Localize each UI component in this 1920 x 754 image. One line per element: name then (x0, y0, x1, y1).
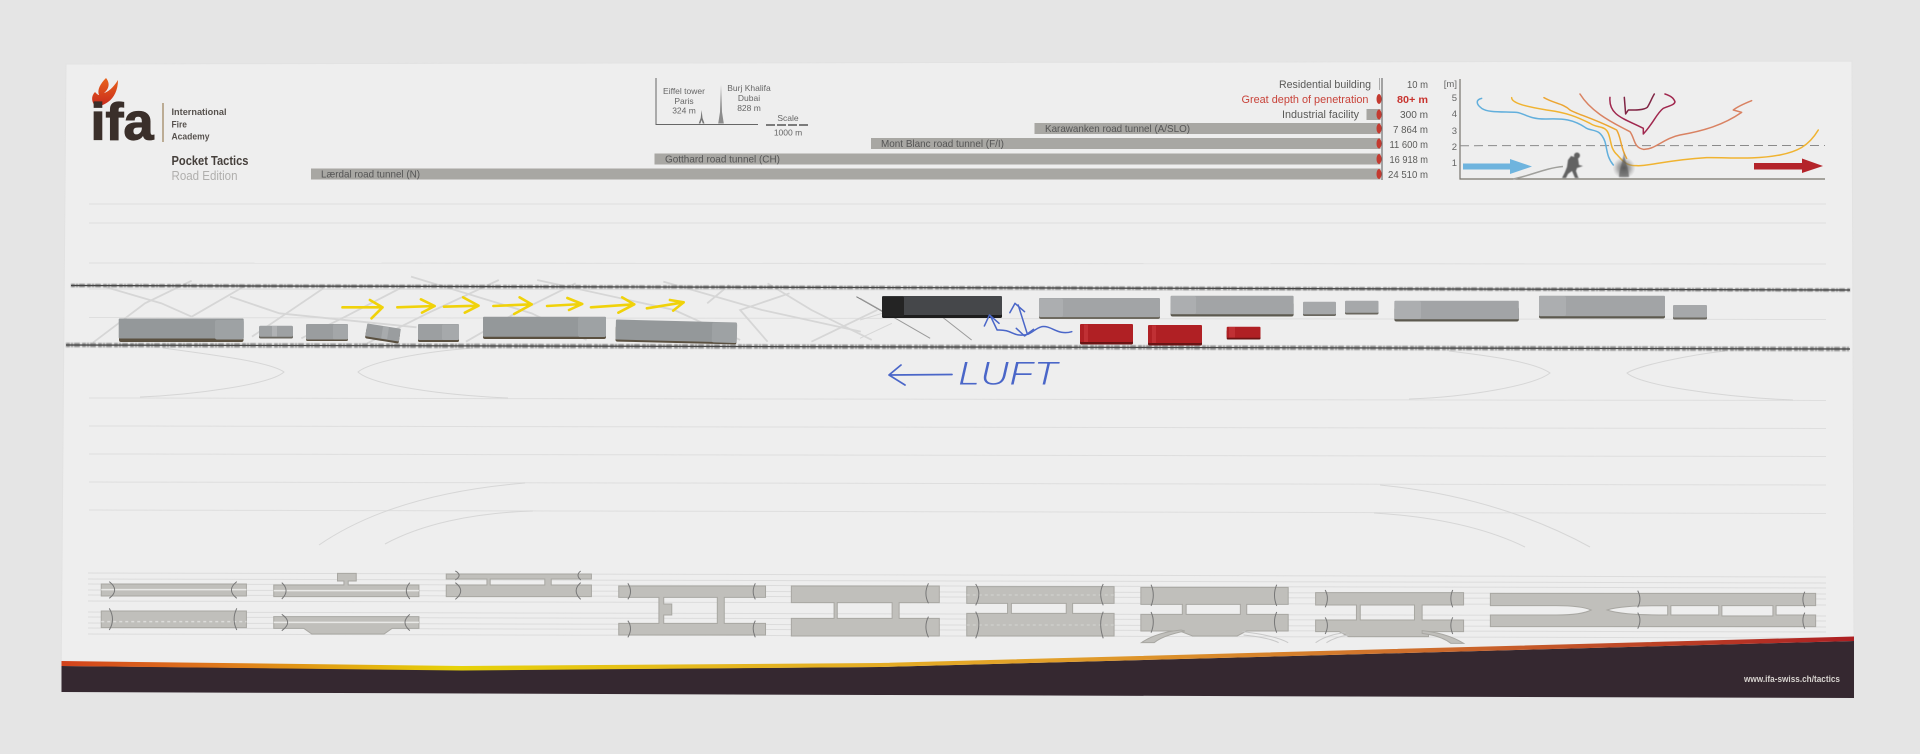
yellow arrows: traffic direction (342, 297, 684, 318)
axis labels: 2 (1452, 142, 1457, 153)
chart axes (1460, 79, 1825, 179)
icon: firefighter (1562, 152, 1583, 178)
bar: Karawanken (1034, 123, 1380, 135)
diagram: twin tubes with bay and ramp (1141, 585, 1288, 643)
tunnel lengths (1388, 79, 1428, 181)
vehicle: truck 3 (615, 320, 737, 344)
tunnel lengths: 80+ m (1397, 94, 1428, 106)
queued vehicles behind the fire (119, 317, 737, 344)
red depth markers (1376, 94, 1382, 179)
road guide lines (89, 204, 1826, 514)
tunnel lengths: 11 600 m (1390, 139, 1428, 151)
scale bar (766, 113, 810, 138)
fire engine 3 (1227, 327, 1260, 340)
pencil tyre marks near truck (860, 298, 972, 340)
label: Residential building: Residential building (1279, 79, 1371, 91)
diagram: tube with emergency bay (274, 614, 419, 634)
blue fresh-air arrow (1463, 159, 1532, 174)
diagram: wide single tube (101, 608, 246, 630)
logo divider (162, 103, 164, 142)
vehicle: car 4 (418, 324, 459, 342)
Eiffel tower label: Paris (674, 96, 694, 106)
tunnel type diagrams, right set (791, 583, 1816, 643)
icon: fire with smoke (1612, 152, 1636, 179)
vehicle: car 6 (1345, 301, 1378, 314)
bottom tunnel wall pencil line (66, 345, 1850, 349)
diagram: service tunnel with cross passages (446, 571, 591, 599)
Burj Khalifa label: Dubai (738, 93, 760, 103)
axis labels: 1 (1452, 158, 1457, 169)
diagram: twin tubes with cross passages (791, 583, 939, 637)
organisation name: Academy (172, 132, 210, 142)
icon: Burj Khalifa (718, 85, 724, 124)
axis labels: 4 (1452, 109, 1457, 120)
tunnel type diagrams, left set (101, 571, 766, 637)
vehicle: truck 7 (1539, 296, 1665, 318)
organisation name: Fire (172, 120, 187, 130)
icon: Eiffel tower (699, 110, 704, 124)
logo wordmark: ifa (90, 94, 155, 152)
scale bar: 1000 m (774, 128, 802, 138)
bar: Laerdal: Lærdal road tunnel (N) (321, 168, 420, 180)
diagram: single tube (101, 582, 246, 598)
LUFT: LUFT (958, 355, 1061, 393)
subheading: Road Edition: Road Edition (172, 169, 238, 183)
organisation name (172, 107, 226, 142)
tunnel lengths: 10 m (1407, 79, 1428, 91)
arrow pointing left (889, 365, 952, 385)
label: Industrial facility: Industrial facility (1282, 109, 1359, 121)
bottom guide lines (88, 573, 1826, 638)
diagram: tube with side niche (274, 573, 419, 599)
Burj Khalifa label (727, 83, 771, 113)
bar: Mont Blanc (871, 138, 1380, 150)
fire engine 2 (1148, 325, 1202, 346)
bar: Gotthard (654, 154, 1380, 166)
top tunnel wall pencil line (71, 286, 1850, 290)
vehicle: car 7 (1673, 305, 1707, 320)
organisation name: International (172, 107, 226, 118)
Eiffel tower label: Eiffel tower (663, 86, 705, 96)
industrial bar (1366, 109, 1380, 120)
axis labels: 5 (1452, 93, 1457, 104)
banner colour stripe (62, 636, 1854, 670)
tunnel lengths: 7 864 m (1393, 124, 1428, 136)
pencil tyre marks (93, 277, 883, 343)
lay-by curve outlines (140, 348, 1793, 547)
logo (90, 78, 226, 152)
vehicle: truck 6 (1394, 301, 1519, 322)
diagram: long twin tubes with merging section (1490, 591, 1816, 629)
fire engine 1 (1080, 324, 1133, 344)
blue hand-drawn smoke and air arrows (984, 303, 1072, 336)
airflow curves (1477, 94, 1818, 166)
vehicle: car 5 (1303, 302, 1336, 316)
axis labels: [m] (1444, 79, 1457, 90)
banner dark band (62, 641, 1854, 698)
Burj Khalifa label: Burj Khalifa (727, 83, 771, 93)
vehicle: truck 4 (1039, 298, 1160, 319)
handwritten note: air direction (889, 355, 1061, 393)
hose (1513, 166, 1563, 179)
axis labels: 3 (1452, 126, 1457, 137)
burning truck (black) (882, 296, 1002, 318)
vehicle: truck 5 (1171, 296, 1294, 316)
bar: Karawanken: Karawanken road tunnel (A/SLO) (1045, 123, 1190, 135)
vehicles beyond the fire and fire brigade (1039, 296, 1707, 346)
tunnel lengths: 300 m (1400, 109, 1428, 121)
axis labels (1444, 79, 1457, 169)
vehicle: car 2 (306, 324, 348, 341)
vehicle: car 1 (259, 326, 293, 338)
vehicle: truck 1 (119, 318, 244, 342)
scale comparison: landmarks (656, 78, 810, 138)
vehicle: car 3 (365, 323, 401, 344)
Eiffel tower label: 324 m (672, 106, 696, 116)
tunnel lengths: 24 510 m (1388, 169, 1428, 181)
tunnel lengths: 16 918 m (1390, 154, 1428, 166)
vehicle: truck 2 (483, 317, 606, 339)
Eiffel tower label (663, 86, 705, 116)
Burj Khalifa label: 828 m (737, 103, 761, 113)
red exhaust arrow (1754, 158, 1823, 173)
footer banner (62, 636, 1854, 698)
vertical end line (1381, 78, 1383, 180)
bar: Laerdal (311, 168, 1380, 180)
residential tick (1379, 78, 1380, 90)
heading: Pocket Tactics: Pocket Tactics (172, 154, 249, 168)
chart: smoke layer profile (1444, 79, 1825, 179)
scale bar: Scale (777, 113, 799, 123)
label: Great depth of penetration: Great depth of penetration (1242, 94, 1368, 106)
diagram: narrow twin tubes with bay and ramp (1316, 590, 1464, 643)
website url: www.ifa-swiss.ch/tactics (1743, 674, 1840, 684)
tunnel length bars (311, 78, 1428, 181)
paper sheet (61, 61, 1854, 698)
diagram: wide twin tubes (967, 584, 1114, 638)
2 m dashed level (1460, 144, 1825, 147)
diagram: twin tubes with niche (619, 583, 766, 637)
bar: Gotthard: Gotthard road tunnel (CH) (665, 154, 780, 166)
bar: Mont Blanc: Mont Blanc road tunnel (F/I) (881, 138, 1004, 150)
baseline and axis (656, 78, 758, 124)
icon: flame (92, 78, 118, 107)
